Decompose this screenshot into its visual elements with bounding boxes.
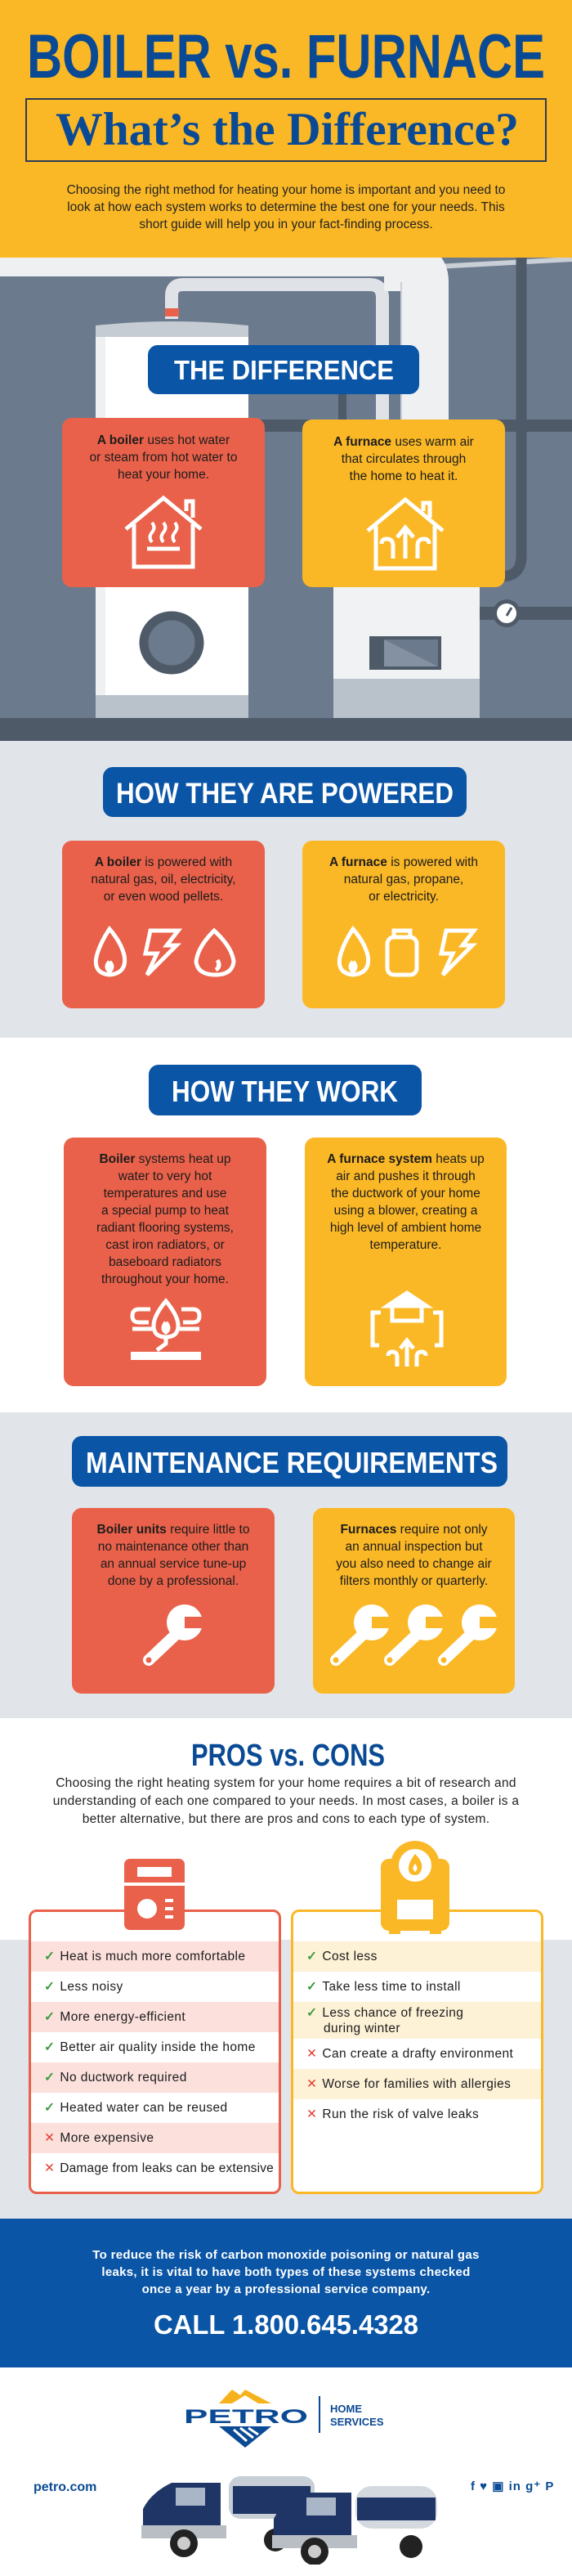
list: furnace pros and cons <box>291 1910 543 2194</box>
card: boiler maintenance <box>72 1508 275 1694</box>
card: furnace maintenance: Furnaces require not only <box>340 1523 488 1537</box>
intro text: Choosing the right method for heating your home is important and you need to look at how each system works to determine the best one for your needs. This short guide will help you in your fact-finding process. <box>67 183 505 231</box>
card: furnace maintenance <box>313 1508 515 1694</box>
icons: three wrenches <box>330 1604 497 1666</box>
card: furnace work: air and pushes it through <box>336 1169 476 1183</box>
card: furnace work: temperature. <box>370 1238 441 1252</box>
card: boiler work: throughout your home. <box>101 1272 229 1286</box>
list: furnace pros and cons: ✕ Run the risk of valve leaks <box>306 2107 479 2121</box>
header: yellow banner <box>0 0 572 258</box>
icon: boiler thermostat <box>124 1859 185 1930</box>
heading: how they are powered <box>103 767 467 817</box>
list: furnace pros and cons: ✕ Worse for families with allergies <box>306 2077 511 2091</box>
heading: how they work <box>149 1065 422 1115</box>
social icons: f ♥ ▣ in g⁺ P <box>471 2480 554 2493</box>
website: petro.com <box>34 2480 96 2494</box>
list: boiler pros and cons: ✓ No ductwork required <box>44 2071 187 2085</box>
card: boiler difference <box>62 418 265 587</box>
card: furnace power <box>302 841 505 1008</box>
card: furnace work: using a blower, creating a <box>334 1204 477 1218</box>
list: furnace pros and cons: during winter <box>324 2022 400 2035</box>
icon: house with air arrows <box>366 497 445 571</box>
icons: flame, lightning, drop <box>93 926 235 976</box>
panel: maintenance requirements <box>0 1412 572 1718</box>
card: boiler power: A boiler is powered with <box>95 855 232 869</box>
heading: the difference <box>148 345 419 394</box>
card: furnace work: A furnace system heats up <box>327 1152 485 1166</box>
icon: burner flame <box>131 1298 201 1360</box>
subtitle box: What’s the Difference? <box>56 104 519 155</box>
footer logo <box>184 2390 384 2448</box>
icon: wrench <box>143 1604 202 1666</box>
heading: the difference: THE DIFFERENCE <box>174 355 394 385</box>
panel: how they work <box>0 1038 572 1412</box>
heading: maintenance <box>72 1436 507 1487</box>
card: furnace maintenance: an annual inspection but <box>345 1540 483 1554</box>
card: boiler power: or even wood pellets. <box>104 890 223 904</box>
card: boiler work: radiant flooring systems, <box>96 1221 234 1235</box>
icon: house with heat <box>124 496 203 569</box>
list: boiler pros and cons: ✓ Less noisy <box>44 1980 123 1994</box>
gray backdrop for pros/cons lists <box>0 1940 572 2219</box>
footer logo: PETRO <box>184 2406 308 2428</box>
panel: the difference illustration <box>0 258 572 741</box>
card: boiler work: water to very hot <box>118 1169 212 1183</box>
footer logo: HOME <box>330 2403 362 2415</box>
card: boiler power <box>62 841 265 1008</box>
card: furnace difference: the home to heat it. <box>350 469 458 483</box>
card: furnace power: or electricity. <box>369 890 439 904</box>
call to action band <box>0 2219 572 2367</box>
illustration: delivery trucks <box>141 2476 437 2565</box>
card: boiler work <box>64 1138 266 1386</box>
list: furnace pros and cons: ✕ Can create a drafty environment <box>306 2047 513 2061</box>
list: furnace pros and cons: ✓ Take less time to install <box>306 1980 461 1994</box>
card: furnace power: A furnace is powered with <box>329 855 478 869</box>
card: furnace maintenance: filters monthly or quarterly. <box>340 1574 488 1588</box>
card: boiler work: baseboard radiators <box>109 1255 221 1269</box>
card: boiler difference: or steam from hot water to <box>90 451 237 464</box>
phone number: CALL 1.800.645.4328 <box>154 2309 418 2340</box>
card: boiler maintenance: done by a professional. <box>108 1574 239 1588</box>
card: furnace work: the ductwork of your home <box>331 1187 480 1200</box>
list: boiler pros and cons: ✓ Heated water can be reused <box>44 2101 228 2115</box>
pros/cons intro text: Choosing the right heating system for your home requires a bit of research and understanding of each one compared to your needs. In most cases, a boiler is a better alternative, but there are pros and cons to each type of system. <box>53 1776 519 1826</box>
icons: flame, propane tank, lightning <box>337 926 478 976</box>
list: furnace pros and cons: ✓ Less chance of freezing <box>306 2006 463 2020</box>
card: boiler difference: heat your home. <box>118 468 209 482</box>
list: boiler pros and cons: ✓ Heat is much more comfortable <box>44 1950 245 1963</box>
safety text: To reduce the risk of carbon monoxide poisoning or natural gas leaks, it is vital to have both types of these systems checked once a year by a professional service company. <box>92 2248 480 2296</box>
card: boiler work: temperatures and use <box>104 1187 226 1200</box>
list: boiler pros and cons: ✓ Better air quality inside the home <box>44 2040 256 2054</box>
card: furnace work: high level of ambient home <box>330 1221 481 1235</box>
list: boiler pros and cons: ✓ More energy-efficient <box>44 2010 185 2024</box>
card: boiler maintenance: Boiler units require little to <box>97 1523 249 1537</box>
list: furnace pros and cons: ✓ Cost less <box>306 1950 378 1963</box>
card: furnace difference: that circulates through <box>342 452 466 466</box>
list: boiler pros and cons: ✕ Damage from leaks can be extensive <box>44 2161 274 2175</box>
footer logo: SERVICES <box>330 2416 384 2428</box>
card: boiler work: cast iron radiators, or <box>105 1238 225 1252</box>
card: furnace maintenance: you also need to change air <box>336 1557 492 1571</box>
card: boiler maintenance: an annual service tune-up <box>101 1557 246 1571</box>
card: boiler work: Boiler systems heat up <box>99 1152 231 1166</box>
card: boiler difference: A boiler uses hot water <box>97 433 230 447</box>
list: boiler pros and cons: ✕ More expensive <box>44 2131 154 2145</box>
card: boiler work: a special pump to heat <box>101 1204 229 1218</box>
card: boiler power: natural gas, oil, electricity, <box>91 873 236 886</box>
icon: furnace unit <box>381 1841 449 1934</box>
card: boiler maintenance: no maintenance other than <box>98 1540 248 1554</box>
list: boiler pros and cons <box>29 1910 281 2194</box>
card: furnace power: natural gas, propane, <box>344 873 463 886</box>
illustration: boiler and furnace background <box>0 258 572 741</box>
card: furnace difference <box>302 420 505 587</box>
card: furnace work <box>305 1138 507 1386</box>
card: furnace difference: A furnace uses warm air <box>333 435 474 449</box>
icon: duct air cycle <box>371 1290 443 1367</box>
panel: how they are powered <box>0 741 572 1038</box>
